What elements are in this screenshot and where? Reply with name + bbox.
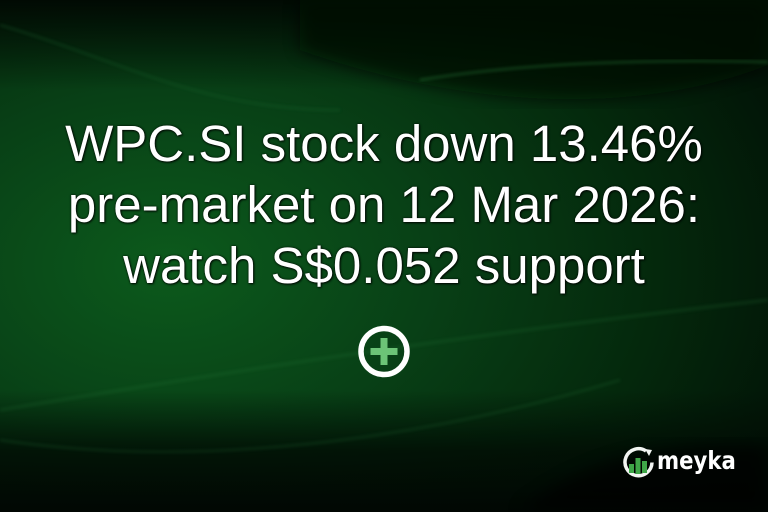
icon: plus in circle xyxy=(358,326,410,378)
title: WPC.SI stock down 13.46% xyxy=(65,115,703,172)
title: pre-market on 12 Mar 2026: xyxy=(68,176,700,233)
logo: meyka xyxy=(623,446,736,478)
wordmark: meyka xyxy=(657,446,736,475)
title: watch S$0.052 support xyxy=(123,237,645,294)
title xyxy=(64,115,703,296)
icon: logo mark xyxy=(623,446,654,478)
